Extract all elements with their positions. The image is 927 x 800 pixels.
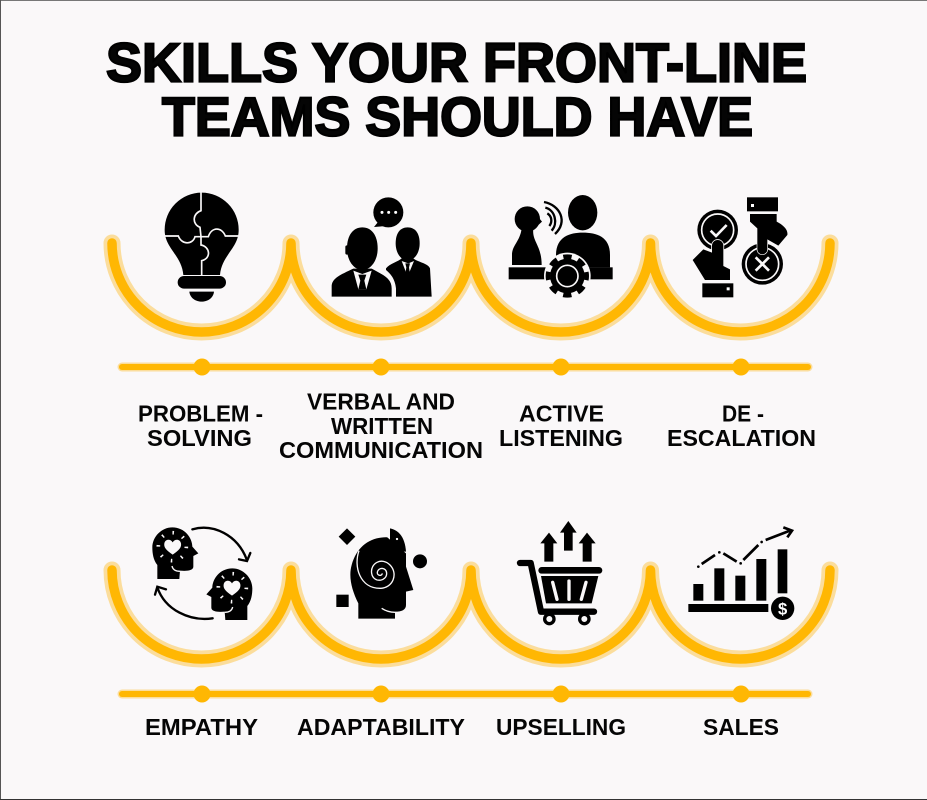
- icon: head with spiral mind: [336, 528, 427, 619]
- label: sales: SALES: [703, 714, 779, 740]
- label: active listening: ACTIVE: [519, 400, 604, 426]
- icon: rising sales bar chart: $: [778, 599, 788, 618]
- bottom row timeline: [122, 686, 808, 702]
- icon: two businessmen talking: [332, 197, 432, 297]
- label: problem-solving: SOLVING: [147, 425, 252, 451]
- label: adaptability: ADAPTABILITY: [297, 714, 465, 740]
- label: active listening: [499, 400, 623, 451]
- label: active listening: LISTENING: [499, 425, 623, 451]
- label: empathy: EMPATHY: [145, 714, 258, 740]
- label: de-escalation: DE -: [722, 400, 764, 426]
- label: verbal and written communication: [279, 388, 483, 463]
- label: verbal and written communication: VERBAL AND: [307, 388, 455, 414]
- bottom row scallop arcs: [112, 570, 830, 659]
- top row timeline: [122, 358, 808, 376]
- icon: rising sales bar chart: [688, 527, 794, 620]
- icon: hands pressing check and cross buttons: [693, 197, 787, 297]
- label: upselling: UPSELLING: [496, 714, 626, 740]
- icon: puzzle light bulb: [164, 192, 239, 302]
- top row scallop arcs: [112, 243, 830, 332]
- label: verbal and written communication: COMMUNICATION: [279, 437, 483, 463]
- title: [106, 33, 807, 148]
- icon: empathy heads with exchange arrows: [152, 527, 252, 620]
- label: de-escalation: ESCALATION: [667, 425, 816, 451]
- icon: active listener with gear: [509, 195, 613, 299]
- label: problem-solving: PROBLEM -: [138, 400, 263, 426]
- title: SKILLS YOUR FRONT-LINE: [106, 33, 807, 94]
- label: de-escalation: [667, 400, 816, 451]
- icon: shopping cart with up arrows: [520, 521, 602, 624]
- label: verbal and written communication: WRITTEN: [331, 413, 433, 439]
- label: problem-solving: [138, 400, 263, 451]
- title: TEAMS SHOULD HAVE: [162, 87, 753, 148]
